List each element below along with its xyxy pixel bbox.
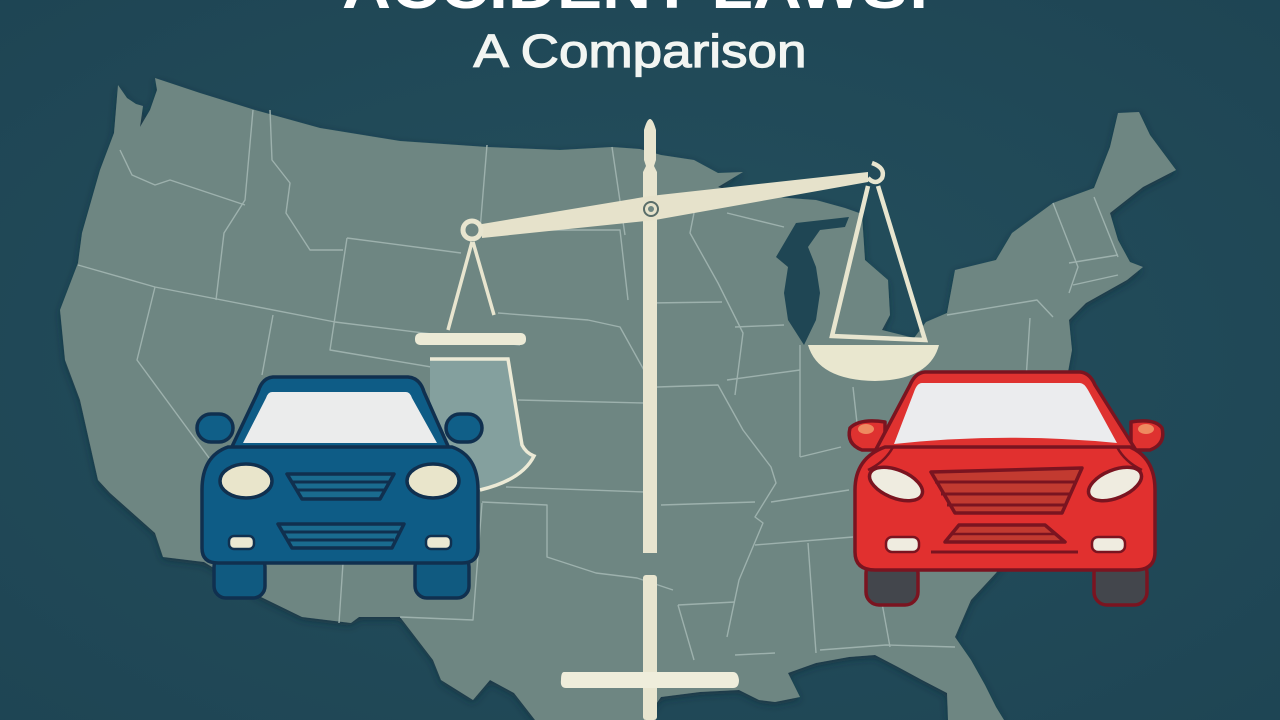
state borders: [78, 110, 1118, 660]
body: [202, 447, 478, 563]
lower grille: [278, 524, 404, 548]
hood lines: [868, 447, 1142, 470]
icon: blue car: [197, 377, 482, 598]
fog lights: [229, 536, 254, 549]
cabin: [228, 377, 452, 455]
subtitle: A Comparison: [474, 25, 806, 77]
lake michigan: [776, 217, 849, 345]
grille: [287, 474, 394, 499]
cabin: [873, 372, 1139, 455]
scale base: [561, 672, 739, 688]
lower grille: [945, 525, 1065, 542]
fog lights: [886, 537, 919, 552]
headlights: [865, 461, 927, 507]
headlights: [220, 464, 272, 498]
right hook: [868, 163, 883, 182]
scale beam: [482, 172, 868, 238]
scale pole: [643, 119, 657, 553]
body: [855, 447, 1155, 570]
mirrors: [197, 414, 233, 442]
left pan bar: [415, 333, 526, 345]
balance scale: [415, 119, 939, 720]
grille: [931, 468, 1082, 513]
windshield: [894, 383, 1117, 444]
left pan ropes: [448, 242, 494, 330]
left pan bucket: [430, 358, 533, 490]
mirrors: [849, 421, 885, 450]
right pan ropes: [832, 186, 925, 340]
windshield: [243, 392, 437, 443]
wheels: [866, 560, 918, 605]
wheels: [214, 555, 265, 598]
icon: red car: [849, 372, 1163, 605]
map of the United States: [60, 78, 1176, 720]
left pivot ring: [463, 221, 481, 239]
right pan: [808, 345, 939, 381]
